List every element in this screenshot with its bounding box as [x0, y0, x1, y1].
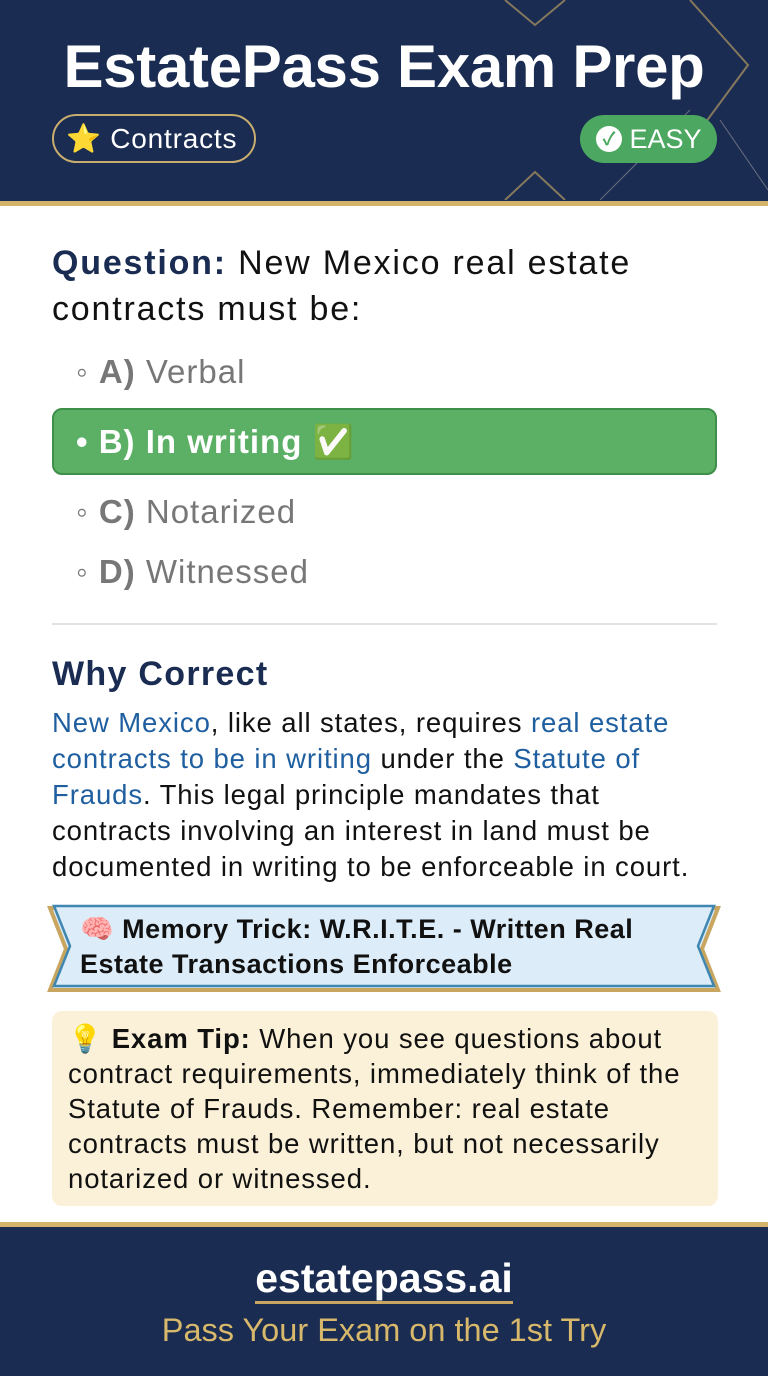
heading: why correct: Why Correct [52, 655, 268, 693]
badge: easy: EASY [630, 124, 702, 154]
badge: easy [580, 115, 717, 163]
explanation text: contracts to be in writing under the Statute of [52, 743, 640, 774]
explanation text: contracts involving an interest in land must be [52, 815, 651, 846]
exam tip box: 💡 Exam Tip: When you see questions about [68, 1023, 662, 1054]
question: contracts must be: [52, 290, 362, 328]
memory trick banner: Estate Transactions Enforceable [80, 949, 513, 979]
explanation text: Frauds. This legal principle mandates that [52, 779, 600, 810]
memory trick banner [47, 904, 721, 992]
option D: ◦ D) Witnessed [76, 553, 309, 590]
footer tagline: Pass Your Exam on the 1st Try [162, 1312, 606, 1348]
option B correct: • B) In writing ✅ [76, 423, 355, 460]
question [52, 244, 631, 328]
title: EstatePass Exam Prep [63, 33, 705, 100]
exam tip box: Statute of Frauds. Remember: real estate [68, 1093, 610, 1124]
option A: ◦ A) Verbal [76, 353, 245, 390]
exam tip box: contracts must be written, but not necessarily [68, 1128, 660, 1159]
badge: contracts [52, 114, 256, 163]
option C: ◦ C) Notarized [76, 493, 296, 530]
exam tip box: notarized or witnessed. [68, 1163, 372, 1194]
memory trick banner: 🧠 Memory Trick: W.R.I.T.E. - Written Real [80, 914, 633, 944]
badge: easy: ✓ [602, 129, 616, 149]
explanation text: New Mexico, like all states, requires real estate [52, 707, 669, 738]
exam tip box: contract requirements, immediately think of the [68, 1058, 680, 1089]
header [0, 0, 768, 206]
options [52, 353, 717, 590]
exam tip box [52, 1011, 718, 1206]
explanation text: documented in writing to be enforceable in court. [52, 851, 689, 882]
badge: contracts: ⭐ Contracts [66, 123, 237, 154]
explanation text [52, 707, 689, 882]
footer [0, 1222, 768, 1376]
footer url: estatepass.ai [255, 1255, 513, 1301]
question: Question: New Mexico real estate [52, 244, 631, 282]
option B correct [52, 408, 717, 475]
